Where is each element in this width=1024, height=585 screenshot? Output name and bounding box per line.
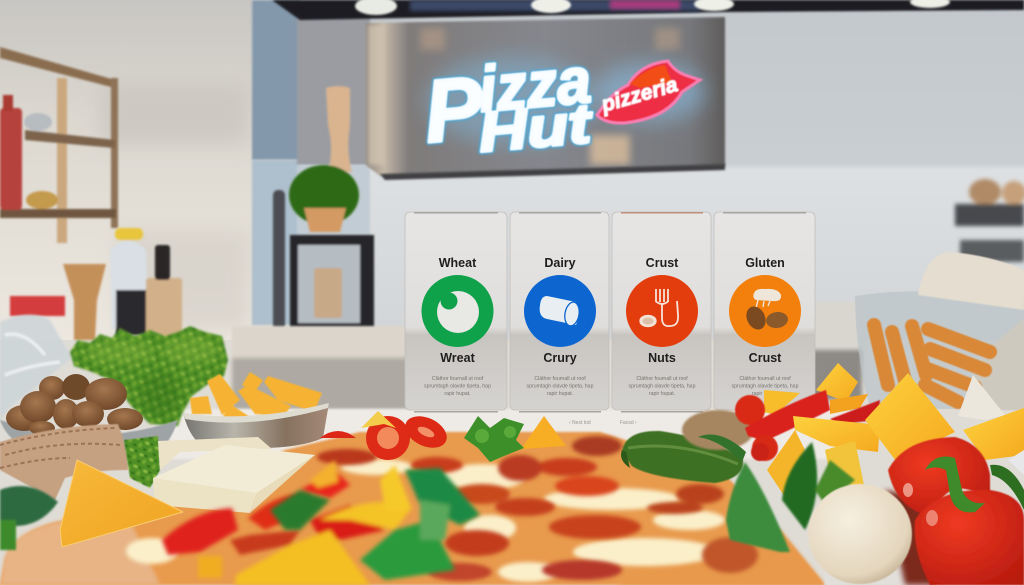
counter top and base xyxy=(232,302,864,410)
pepperoni xyxy=(317,436,758,581)
shelves xyxy=(0,47,118,316)
card: Crust xyxy=(612,212,711,412)
label: Nuts: Nuts xyxy=(648,351,676,365)
card: Gluten xyxy=(714,212,815,410)
pager text: Facsd › xyxy=(620,420,637,426)
glass bowl with pasta xyxy=(855,252,1024,420)
description: rapir hupat. xyxy=(547,391,573,397)
red bell peppers xyxy=(888,437,1024,585)
neon logo: Pizza Hut: izza xyxy=(476,44,594,126)
heading: Dairy: Dairy xyxy=(544,256,576,270)
label: Wreat: Wreat xyxy=(440,351,476,365)
large cheese chunks right xyxy=(767,373,1024,497)
mozzarella xyxy=(126,459,725,582)
tomatoes xyxy=(320,410,452,460)
icon: blue circle xyxy=(524,275,596,347)
mozzarella ball xyxy=(808,484,912,584)
yellow cheese wedge xyxy=(60,460,183,547)
potato and leaf xyxy=(682,410,754,462)
neon logo: red badge: pizzeria xyxy=(598,73,681,117)
description: sprumtagh olavde tipeta, hap xyxy=(527,384,594,390)
neon logo: Pizza Hut: Hut xyxy=(476,91,596,164)
spinach wrap xyxy=(726,442,855,552)
heading: Crust: Crust xyxy=(646,256,679,270)
icon: green circle xyxy=(422,275,494,347)
crust foreground xyxy=(0,520,160,585)
bowl of nuts xyxy=(0,374,178,452)
red chili and small tomatoes xyxy=(735,390,880,461)
bread loaf xyxy=(0,424,128,500)
dark gap behind peppers xyxy=(885,490,935,585)
neon logo: Pizza Hut: Hut xyxy=(476,91,596,164)
description: sprumtagh olavde tipeta, hap xyxy=(424,384,491,390)
pizza xyxy=(0,410,825,585)
description xyxy=(629,376,696,397)
description: rapir hupat. xyxy=(649,391,675,397)
description: rapir hupat. xyxy=(752,391,778,397)
description: Cläthor fournall ut roof xyxy=(534,376,586,382)
description xyxy=(527,376,594,397)
neon logo: Pizza Hut: izza xyxy=(476,44,594,126)
steel sign panel xyxy=(366,17,725,180)
herbs xyxy=(70,326,228,426)
white tablecloth bottom right xyxy=(825,555,945,585)
plastic bag xyxy=(0,314,72,420)
card: Wheat xyxy=(405,212,507,412)
pager text xyxy=(569,420,637,426)
rolling pin and green pot xyxy=(273,86,374,330)
description: sprumtagh olavde tipeta, hap xyxy=(629,384,696,390)
neon logo: Pizza Hut: P xyxy=(420,58,487,161)
icon: orange circle nuts xyxy=(729,275,801,347)
neon logo: Pizza Hut: P xyxy=(420,58,487,161)
description xyxy=(424,376,491,397)
wedges on pizza xyxy=(361,411,396,428)
description: sprumtagh olavde tipeta, hap xyxy=(732,384,799,390)
description xyxy=(732,376,799,397)
parsley xyxy=(464,416,524,462)
description: Cläthor fournall ut roof xyxy=(432,376,484,382)
herb sprig xyxy=(124,436,160,488)
label: Crust: Crust xyxy=(749,351,782,365)
blurred peppers and greens on pizza xyxy=(162,460,480,585)
label: Crury: Crury xyxy=(543,351,577,365)
card: Dairy xyxy=(510,212,609,412)
allergen cards xyxy=(405,212,815,426)
neon logo: Pizza Hut xyxy=(420,44,706,168)
spinach leaves xyxy=(0,486,58,550)
bowl of cheese sticks xyxy=(183,372,329,448)
table surface xyxy=(170,409,850,459)
ceiling with lights xyxy=(272,0,1024,20)
pager text: ‹ Next tod xyxy=(569,420,591,426)
description: Cläthor fournall ut roof xyxy=(739,376,791,382)
right shelf blurred xyxy=(955,179,1024,262)
yellow cheese chunks behind chili xyxy=(764,363,868,415)
description: Cläthor fournall ut roof xyxy=(636,376,688,382)
green zucchini xyxy=(621,431,743,483)
counter items left xyxy=(63,228,182,340)
icon: red circle fork xyxy=(626,275,698,347)
heading: Gluten: Gluten xyxy=(745,256,785,270)
white cheese blocks xyxy=(153,437,315,513)
heading: Wheat: Wheat xyxy=(439,256,477,270)
neon logo: red badge xyxy=(597,61,700,123)
description: rapir hupat. xyxy=(444,391,471,397)
